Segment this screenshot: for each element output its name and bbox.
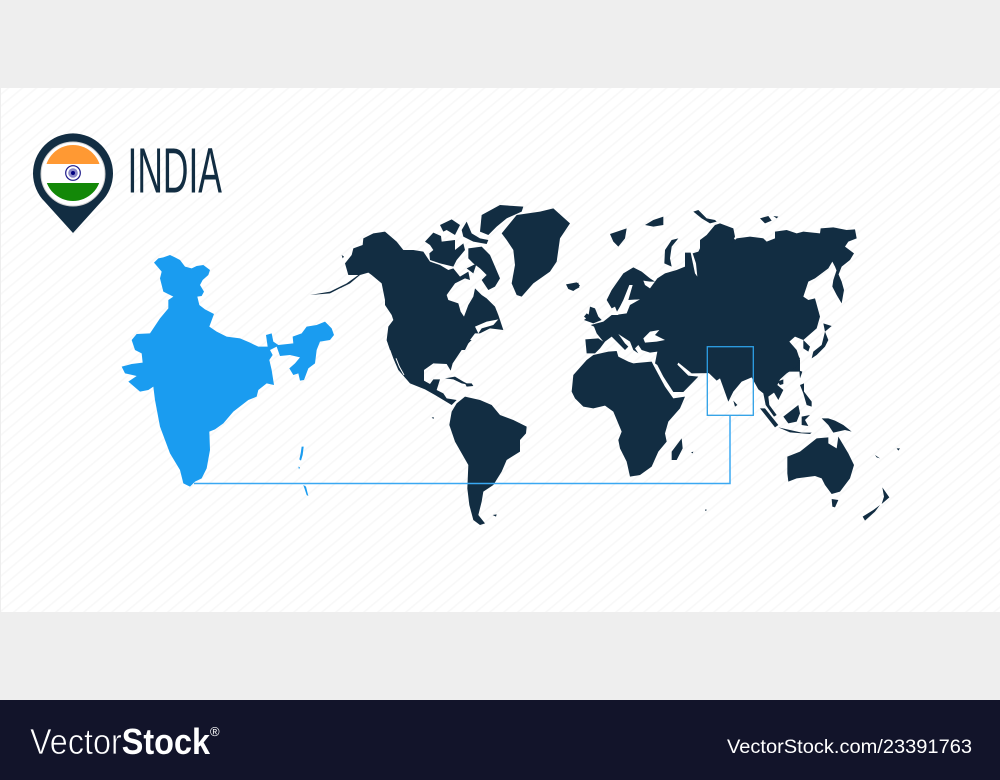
map: South and Southeast Asia, Australia, New Zealand [700, 350, 900, 521]
footer image id: VectorStock.com/23391763 [727, 736, 972, 758]
panel: map card [1, 88, 1000, 612]
footer band [0, 700, 1000, 780]
map: world [310, 205, 900, 525]
map: Europe and western Asia [570, 210, 741, 392]
map: North America and Arctic islands [310, 205, 523, 350]
title: INDIA [128, 134, 222, 206]
map: India enlarged [122, 255, 334, 496]
map: Central America and Caribbean [387, 340, 473, 419]
connector line [194, 416, 730, 484]
map: South America and Greenland [449, 208, 580, 525]
icon: map pin with Indian flag [33, 133, 113, 233]
footer logo: VectorStock [30, 721, 211, 762]
map: East Asia and Japan [700, 216, 857, 372]
map: Africa and Madagascar [572, 351, 707, 511]
locator box [707, 347, 753, 415]
registered mark: ® [210, 724, 220, 739]
